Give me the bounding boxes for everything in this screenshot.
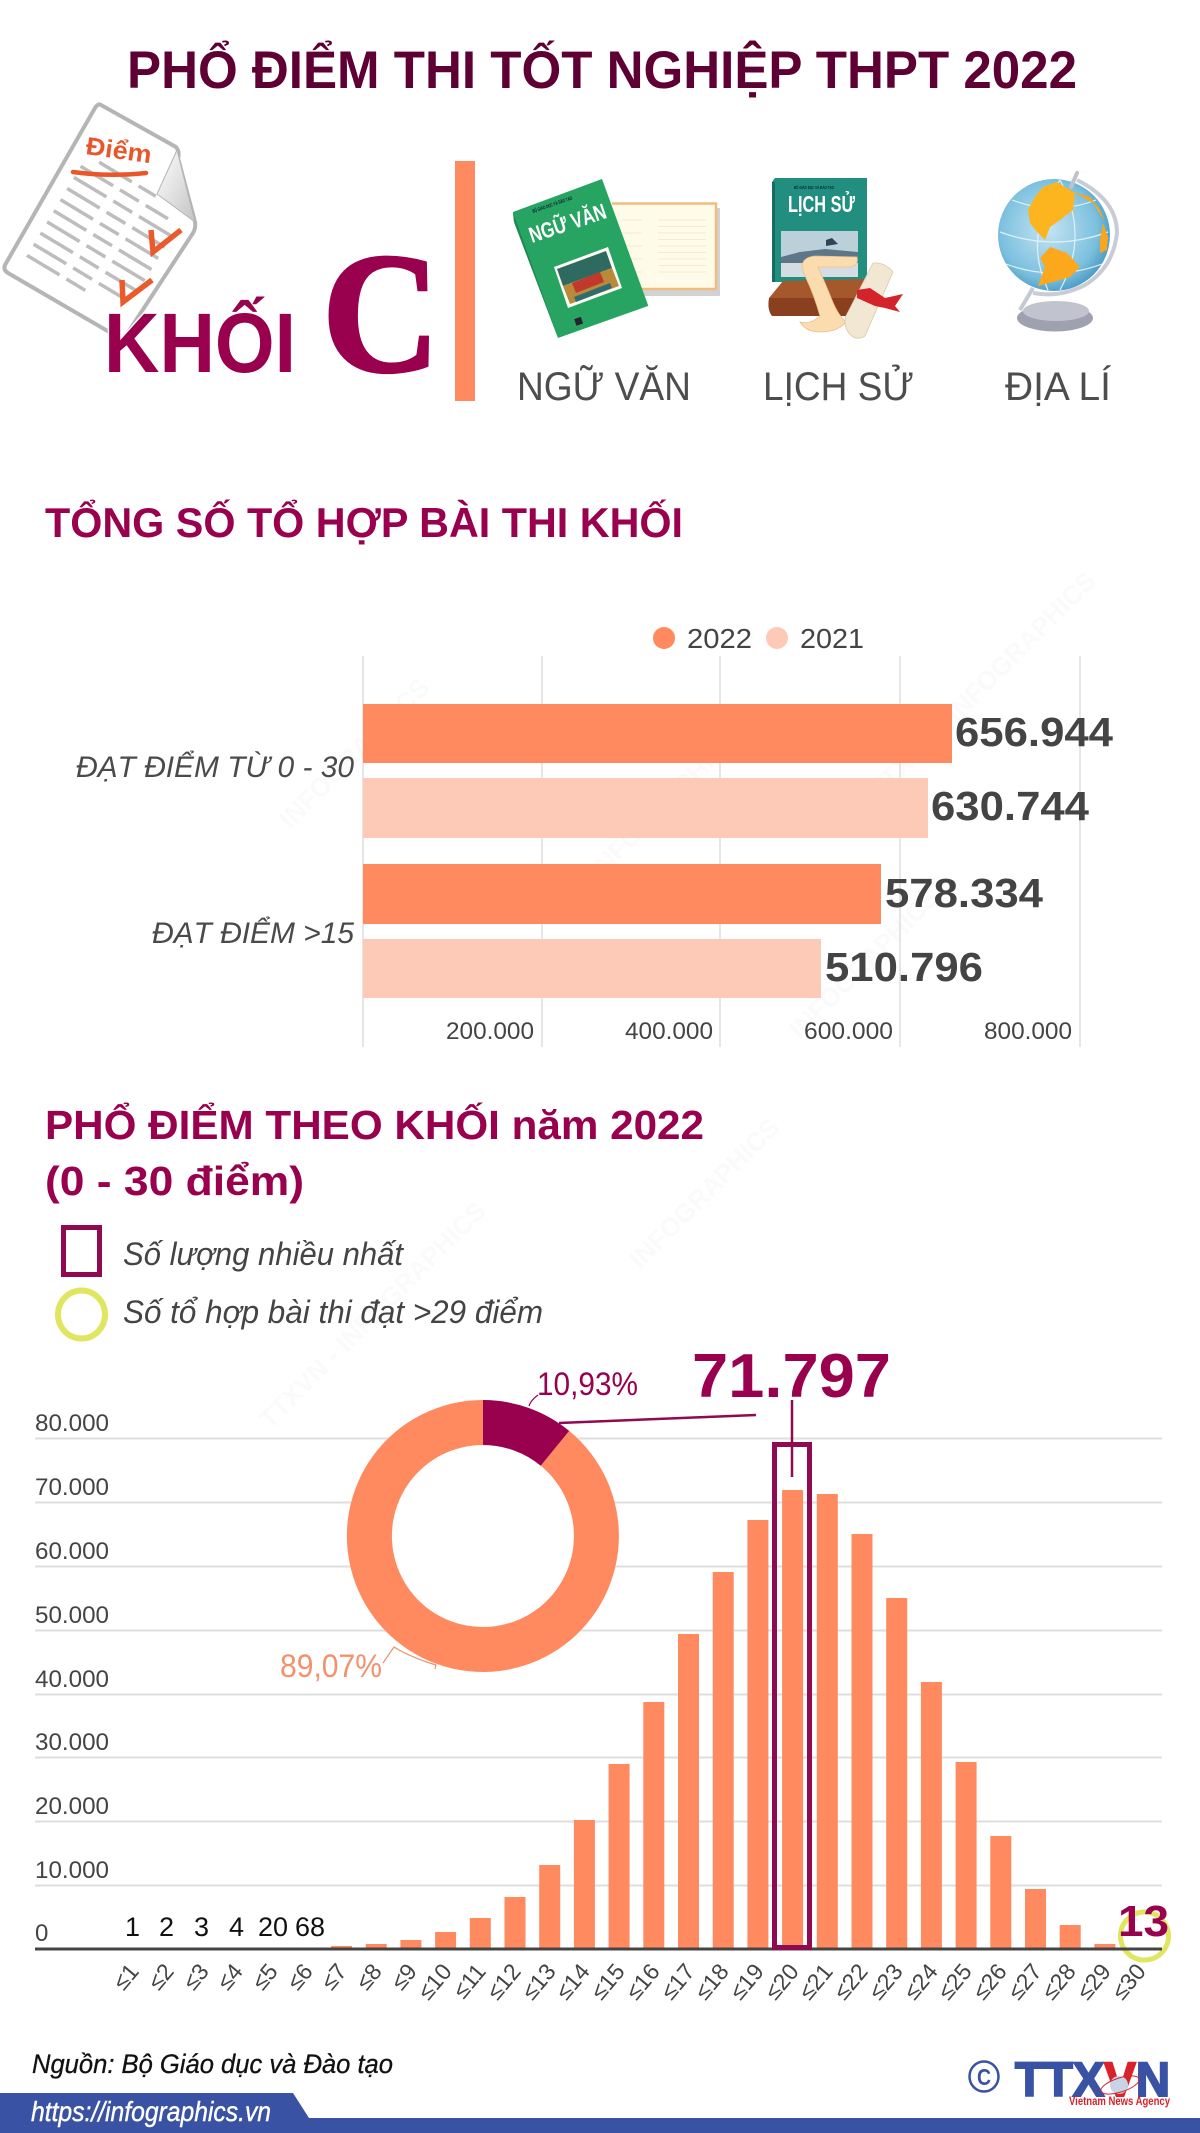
- legend: highest count: Số lượng nhiều nhất: [123, 1236, 404, 1272]
- label: 89,07%: 89,07%: [280, 1648, 382, 1684]
- logo: TTXVN: TTXVN: [1015, 2054, 1170, 2107]
- y axis labels: 60.000: [35, 1538, 109, 1565]
- infographic canvas: INFOGRAPHICS: [583, 722, 745, 884]
- y axis labels: 0: [35, 1920, 48, 1947]
- title: PHỔ ĐIỂM THI TỐT NGHIỆP THPT 2022: [127, 39, 1077, 100]
- bars: above 15 points: ĐẠT ĐIỂM >15: [152, 916, 354, 950]
- column chart: score distribution: [35, 1342, 1169, 2004]
- donut chart: share of candidates: [280, 1366, 756, 1684]
- icon: literature book: [513, 179, 720, 338]
- heading: total combinations: TỔNG SỐ TỔ HỢP BÀI THI KHỐI: [45, 497, 683, 546]
- x axis labels: ≤30: [1106, 1959, 1151, 2004]
- y axis labels: [35, 1410, 109, 1947]
- y axis labels: 50.000: [35, 1602, 109, 1629]
- low count labels: 2: [159, 1912, 174, 1942]
- source note: Nguồn: Bộ Giáo dục và Đào tạo: [32, 2049, 393, 2079]
- x axis labels: ≤14: [550, 1958, 595, 2004]
- value: 71.797 leader: [791, 1400, 793, 1477]
- x axis labels: ≤12: [481, 1959, 526, 2004]
- y axis labels: 20.000: [35, 1793, 109, 1820]
- legend: above 29 points: [58, 1290, 543, 1338]
- infographic canvas: TTXVN - INFOGRAPHICS: [253, 1195, 492, 1434]
- x axis labels: ≤9: [386, 1959, 422, 1995]
- y axis labels: 70.000: [35, 1474, 109, 1501]
- low count labels: 20: [258, 1912, 288, 1942]
- label: geography: ĐỊA LÍ: [1005, 364, 1112, 409]
- x axis labels: ≤13: [516, 1959, 561, 2004]
- leader: to peak value: [559, 1415, 756, 1423]
- x axis labels: 600.000: [804, 1018, 893, 1045]
- low count labels: 1: [125, 1912, 140, 1942]
- bars: 0-30 points: 656.944: [955, 709, 1113, 755]
- bars: 0-30 points: ĐẠT ĐIỂM TỪ 0 - 30: [76, 750, 354, 784]
- value: 13: 13: [1118, 1897, 1169, 1946]
- infographic canvas: INFOGRAPHICS: [623, 1112, 785, 1274]
- y axis labels: 30.000: [35, 1729, 109, 1756]
- icon: literature book: BỘ GIÁO DỤC VÀ ĐÀO TẠO: [531, 194, 573, 215]
- y axis labels: 10.000: [35, 1857, 109, 1884]
- icon: globe: [998, 173, 1117, 332]
- label: 89,07%: [280, 1647, 436, 1684]
- x axis labels: 800.000: [984, 1018, 1072, 1045]
- low count labels: 68: [295, 1912, 325, 1942]
- heading: distribution: (0 - 30 điểm): [45, 1158, 304, 1204]
- x axis labels: ≤11: [447, 1959, 491, 2003]
- x axis labels: [108, 1958, 1151, 2004]
- bars: above 15 points: [152, 864, 1043, 998]
- x axis labels: ≤23: [863, 1959, 908, 2004]
- legend: highest count: [64, 1228, 404, 1274]
- icon: history book and scroll: LỊCH SỬ: [788, 189, 856, 217]
- x axis labels: ≤17: [655, 1959, 700, 2004]
- icon: history book and scroll: BỘ GIÁO DỤC VÀ ĐÀO TẠO: [794, 183, 834, 190]
- icon: score sheet: Điểm: [84, 132, 153, 169]
- x axis labels: ≤25: [932, 1959, 977, 2004]
- y axis labels: 80.000: [35, 1410, 109, 1437]
- bars: above 15 points: 578.334: [885, 870, 1043, 916]
- x axis labels: ≤6: [282, 1959, 318, 1995]
- heading: letter C: C: [322, 219, 440, 409]
- y axis labels: 40.000: [35, 1666, 109, 1693]
- x axis labels: ≤20: [759, 1959, 804, 2004]
- highlight: circle at 30: [1120, 1912, 1168, 1960]
- x axis labels: ≤29: [1071, 1959, 1116, 2004]
- x axis labels: ≤10: [412, 1959, 457, 2004]
- x axis labels: ≤18: [689, 1959, 734, 2004]
- x axis labels: ≤21: [793, 1959, 838, 2004]
- x axis labels: 200.000: [446, 1018, 534, 1045]
- x axis labels: ≤28: [1036, 1959, 1081, 2004]
- x axis labels: ≤27: [1002, 1959, 1047, 2004]
- logo: TTXVN: Vietnam News Agency: [1069, 2094, 1170, 2108]
- low count labels: [125, 1912, 325, 1942]
- label: 10,93%: 10,93%: [537, 1366, 638, 1402]
- heading: khoi: KHỐI: [104, 296, 296, 390]
- x axis labels: [446, 1018, 1072, 1045]
- legend: above 29 points: Số tổ hợp bài thi đạt >29 điểm: [123, 1294, 543, 1330]
- accent bar: [455, 161, 475, 401]
- bars: 0-30 points: 630.744: [931, 783, 1089, 829]
- bar chart: total combinations: [76, 623, 1113, 1047]
- icon: literature book: NGỮ VĂN: [526, 199, 609, 248]
- x axis labels: ≤22: [828, 1959, 873, 2004]
- legend: years: 2021: [800, 623, 864, 654]
- infographic canvas: TTXVN - INFOGRAPHICS: [863, 565, 1102, 804]
- x axis labels: ≤26: [967, 1959, 1012, 2004]
- axis line: [35, 1948, 1162, 1950]
- logo: TTXVN: C: [977, 2064, 991, 2090]
- footer band: [0, 2093, 1200, 2133]
- value: 71.797: 71.797: [692, 1342, 891, 1411]
- label: history: LỊCH SỬ: [763, 363, 914, 409]
- x axis labels: ≤4: [212, 1958, 248, 1995]
- heading: distribution: [45, 1101, 704, 1204]
- icon: history book and scroll: [768, 178, 903, 338]
- x axis labels: ≤3: [178, 1959, 214, 1995]
- legend: years: 2022: [687, 623, 752, 654]
- bars: above 15 points: 510.796: [825, 944, 983, 990]
- x axis labels: ≤1: [108, 1959, 144, 1995]
- x axis labels: ≤5: [247, 1959, 283, 1995]
- x axis labels: ≤2: [143, 1959, 179, 1995]
- icon: score sheet: [4, 104, 195, 340]
- infographic canvas: INFOGRAPHICS: [273, 672, 435, 834]
- x axis labels: ≤19: [724, 1959, 769, 2004]
- x axis labels: ≤15: [585, 1959, 630, 2004]
- bars: 0-30 points: [76, 704, 1113, 838]
- x axis labels: ≤16: [620, 1959, 665, 2004]
- x axis labels: ≤8: [351, 1959, 387, 1995]
- x axis labels: ≤24: [898, 1958, 943, 2004]
- low count labels: 3: [194, 1912, 209, 1942]
- highlight: box at 20: [774, 1444, 810, 1948]
- x axis labels: 400.000: [625, 1018, 713, 1045]
- low count labels: 4: [229, 1912, 244, 1942]
- footer band: https://infographics.vn: [31, 2096, 271, 2127]
- legend: years: [653, 623, 864, 654]
- x axis labels: ≤7: [316, 1959, 352, 1995]
- bars: [331, 1490, 1115, 1949]
- label: literature: NGỮ VĂN: [517, 364, 691, 409]
- infographic canvas: INFOGRAPHICS: [783, 882, 945, 1044]
- heading: distribution: PHỔ ĐIỂM THEO KHỐI năm 2022: [45, 1101, 704, 1148]
